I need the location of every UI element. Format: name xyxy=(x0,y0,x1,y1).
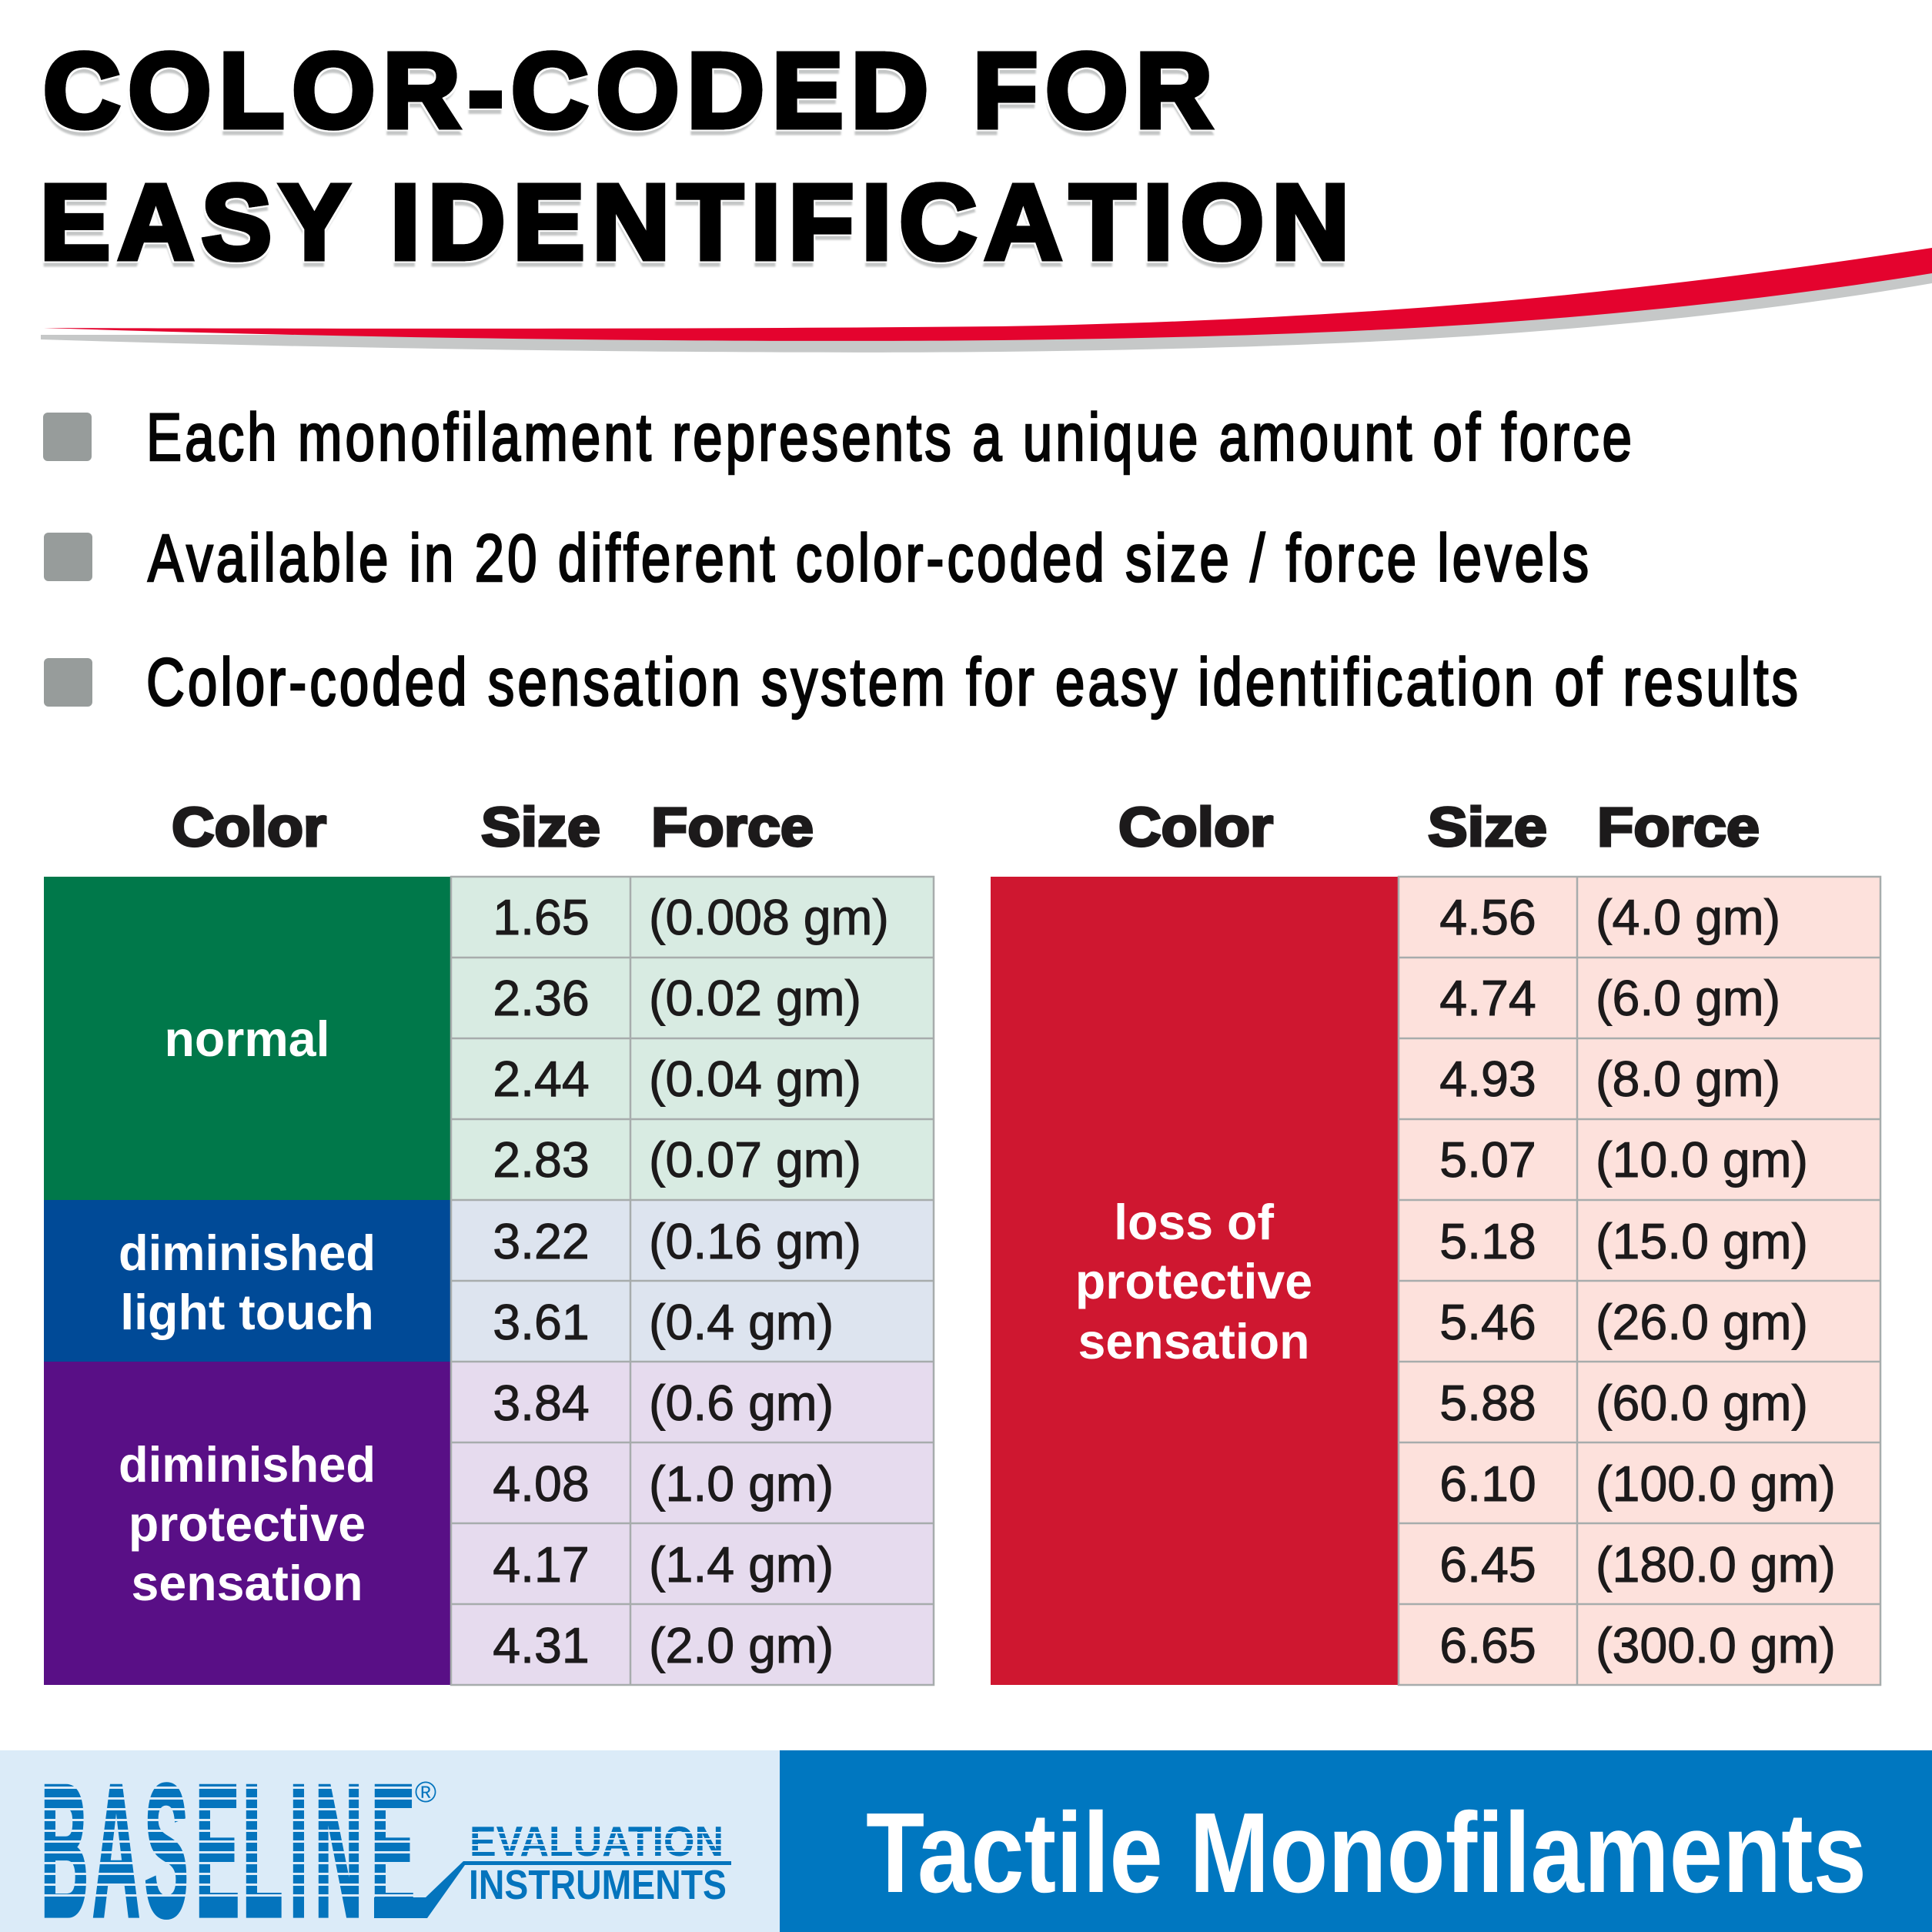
row 4.93: (8.0 gm) xyxy=(1596,1051,1780,1107)
row 4.74: 4.74 xyxy=(1439,971,1536,1026)
row 2.36: (0.02 gm) xyxy=(649,971,861,1026)
row 4.93: 4.93 xyxy=(1439,1051,1536,1107)
row 3.84: (0.6 gm) xyxy=(649,1375,834,1431)
row 4.31 xyxy=(493,1618,834,1673)
row 4.08: 4.08 xyxy=(493,1456,590,1512)
category: loss of protective sensation: protective xyxy=(1075,1254,1312,1309)
row 5.46 xyxy=(1439,1295,1808,1350)
title: IDENTIFICATION xyxy=(390,163,1357,282)
category: diminished protective sensation xyxy=(44,1362,451,1685)
category: loss of protective sensation: loss of xyxy=(1114,1195,1274,1250)
title: COLOR-CODED xyxy=(43,32,936,150)
row 5.88: 5.88 xyxy=(1439,1375,1536,1431)
row 4.17: (1.4 gm) xyxy=(649,1537,834,1593)
row 3.22: 3.22 xyxy=(493,1214,590,1269)
row 6.65: 6.65 xyxy=(1439,1618,1536,1673)
row 3.61: 3.61 xyxy=(493,1295,590,1350)
left table header: Size xyxy=(481,797,600,858)
row 6.45: (180.0 gm) xyxy=(1596,1537,1836,1593)
category: diminished protective sensation: sensation xyxy=(131,1556,363,1611)
row 2.44 xyxy=(493,1051,861,1107)
row 3.84: 3.84 xyxy=(493,1375,590,1431)
category: diminished protective sensation: diminished xyxy=(119,1437,376,1492)
row 4.17: 4.17 xyxy=(493,1537,590,1593)
row 3.61 xyxy=(493,1295,834,1350)
row 4.56: 4.56 xyxy=(1439,890,1536,945)
left table header: Force xyxy=(651,797,814,858)
right table cell backgrounds xyxy=(1399,877,1880,1685)
row 5.07: (10.0 gm) xyxy=(1596,1132,1808,1188)
logo: EVALUATION: EVALUATION xyxy=(470,1817,724,1865)
right table header: Color xyxy=(1118,797,1273,858)
row 2.83: 2.83 xyxy=(493,1132,590,1188)
row 6.45 xyxy=(1439,1537,1836,1593)
row 4.56: (4.0 gm) xyxy=(1596,890,1780,945)
row 5.18: (15.0 gm) xyxy=(1596,1214,1808,1269)
row 6.10: (100.0 gm) xyxy=(1596,1456,1836,1512)
row 4.56 xyxy=(1439,890,1780,945)
row 5.07: 5.07 xyxy=(1439,1132,1536,1188)
logo: registered mark: ® xyxy=(415,1777,436,1809)
logo: check swoosh xyxy=(374,1861,731,1918)
row 2.44: 2.44 xyxy=(493,1051,590,1107)
row 1.65 xyxy=(493,890,889,945)
left table header: Color xyxy=(172,797,326,858)
category: normal xyxy=(44,877,451,1200)
row 5.46: (26.0 gm) xyxy=(1596,1295,1808,1350)
row 5.88: (60.0 gm) xyxy=(1596,1375,1808,1431)
category: diminished protective sensation: protective xyxy=(129,1496,366,1552)
row 1.65: (0.008 gm) xyxy=(649,890,889,945)
row 2.36: 2.36 xyxy=(493,971,590,1026)
bullet list xyxy=(43,400,1801,720)
row 4.31: 4.31 xyxy=(493,1618,590,1673)
category: loss of protective sensation xyxy=(991,877,1399,1685)
logo: INSTRUMENTS: INSTRUMENTS xyxy=(469,1862,727,1908)
right table xyxy=(991,797,1880,1685)
row 4.74 xyxy=(1439,971,1780,1026)
row 5.18 xyxy=(1439,1214,1808,1269)
row 1.65: 1.65 xyxy=(493,890,590,945)
footer product panel xyxy=(780,1750,1932,1932)
category: loss of protective sensation: sensation xyxy=(1078,1314,1310,1369)
row 4.93 xyxy=(1439,1051,1780,1107)
title: FOR xyxy=(973,32,1220,150)
footer logo panel xyxy=(0,1745,780,1932)
row 4.08 xyxy=(493,1456,834,1512)
category: diminished light touch: diminished xyxy=(119,1225,376,1281)
row 5.07 xyxy=(1439,1132,1808,1188)
row 6.65 xyxy=(1439,1618,1836,1673)
row 4.17 xyxy=(493,1537,834,1593)
title: EASY xyxy=(40,163,357,282)
left table header xyxy=(172,797,814,858)
row 6.65: (300.0 gm) xyxy=(1596,1618,1836,1673)
row 3.84 xyxy=(493,1375,834,1431)
right table header xyxy=(1118,797,1760,858)
row 2.36 xyxy=(493,971,861,1026)
row 6.10: 6.10 xyxy=(1439,1456,1536,1512)
category: diminished light touch xyxy=(44,1200,451,1362)
bullet 2: Available in 20 different color-coded size / force levels xyxy=(148,521,1592,596)
row 6.45: 6.45 xyxy=(1439,1537,1536,1593)
row 6.10 xyxy=(1439,1456,1836,1512)
row 5.88 xyxy=(1439,1375,1808,1431)
row 2.83: (0.07 gm) xyxy=(649,1132,861,1188)
right table header: Size xyxy=(1428,797,1547,858)
category: diminished light touch: light touch xyxy=(120,1285,374,1340)
row 5.18: 5.18 xyxy=(1439,1214,1536,1269)
row 3.22 xyxy=(493,1214,861,1269)
right table header: Force xyxy=(1597,797,1760,858)
row 2.44: (0.04 gm) xyxy=(649,1051,861,1107)
red swoosh divider xyxy=(41,248,1932,353)
row 2.83 xyxy=(493,1132,861,1188)
row 4.08: (1.0 gm) xyxy=(649,1456,834,1512)
left table cell backgrounds xyxy=(451,877,934,1685)
row 4.74: (6.0 gm) xyxy=(1596,971,1780,1026)
title xyxy=(40,32,1357,282)
row 3.22: (0.16 gm) xyxy=(649,1214,861,1269)
row 3.61: (0.4 gm) xyxy=(649,1295,834,1350)
row 5.46: 5.46 xyxy=(1439,1295,1536,1350)
row 4.31: (2.0 gm) xyxy=(649,1618,834,1673)
category: normal: normal xyxy=(164,1011,330,1067)
left table xyxy=(44,797,934,1685)
